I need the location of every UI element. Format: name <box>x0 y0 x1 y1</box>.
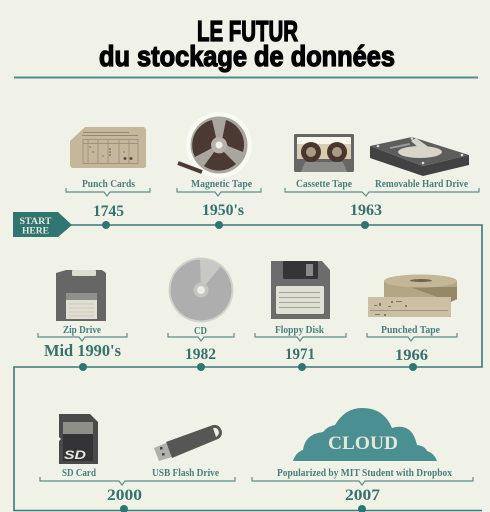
start tag <box>13 212 72 237</box>
label: punched tape: 1966 <box>395 347 428 364</box>
label: floppy disk <box>255 325 346 363</box>
icon: cloud <box>293 408 437 461</box>
icon: removable hard drive <box>370 137 469 176</box>
label: punched tape <box>367 325 457 364</box>
icon: CD <box>168 258 234 322</box>
label: cassette tape and hard drive: Removable Hard Drive <box>375 179 469 190</box>
timeline path <box>14 225 482 510</box>
label: magnetic tape: Magnetic Tape <box>191 179 253 190</box>
label: SD card and USB <box>40 468 235 504</box>
title <box>99 16 395 73</box>
icon: punch card <box>70 127 146 168</box>
label: CD <box>168 326 234 363</box>
label: punch cards <box>66 179 150 220</box>
icon: cassette tape <box>294 134 354 172</box>
label: cloud <box>252 468 473 504</box>
label: zip drive: Zip Drive <box>63 325 102 336</box>
label: SD card and USB: 2000 <box>107 487 142 504</box>
label: zip drive <box>38 325 127 360</box>
icon: magnetic tape reel <box>178 112 252 178</box>
icon: USB flash drive <box>154 425 222 461</box>
icon: SD card <box>59 414 98 464</box>
label: cassette tape and hard drive: Cassette Tape <box>296 179 353 190</box>
label: punch cards: Punch Cards <box>82 179 135 190</box>
label: cassette tape and hard drive <box>285 179 479 219</box>
icon: zip drive <box>56 270 106 321</box>
icon: punched tape <box>368 274 457 317</box>
title: LE FUTUR <box>197 16 298 48</box>
label: CD: 1982 <box>185 346 216 363</box>
label: floppy disk: Floppy Disk <box>275 325 324 336</box>
title: du stockage de données <box>99 41 395 73</box>
start tag: HERE <box>22 226 49 236</box>
label: punch cards: 1745 <box>93 203 124 220</box>
label: SD card and USB: USB Flash Drive <box>152 468 220 479</box>
label: zip drive: Mid 1990's <box>44 341 121 360</box>
icon: floppy disk <box>271 261 330 319</box>
label: floppy disk: 1971 <box>285 346 315 363</box>
label: SD card and USB: SD Card <box>62 468 96 479</box>
label: punched tape: Punched Tape <box>381 325 441 336</box>
label: CD: CD <box>194 326 207 337</box>
timeline dots <box>79 221 417 512</box>
icon: SD card: SD <box>64 448 86 462</box>
icon: cloud: CLOUD <box>328 433 398 454</box>
start tag: START <box>20 217 52 227</box>
label: magnetic tape <box>177 179 261 219</box>
label: cloud: Popularized by MIT Student with Dropbox <box>277 468 452 479</box>
label: cloud: 2007 <box>345 487 380 504</box>
label: cassette tape and hard drive: 1963 <box>350 202 382 219</box>
label: magnetic tape: 1950's <box>202 202 244 219</box>
